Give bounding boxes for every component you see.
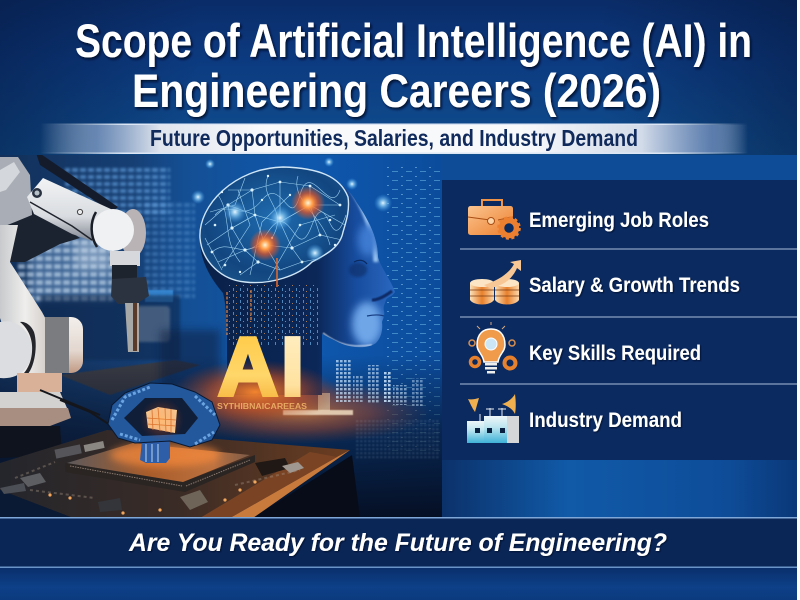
AI glow and letters bbox=[178, 336, 332, 421]
shoulder rollers bbox=[69, 317, 83, 373]
scene backdrop with blurred city bbox=[0, 155, 442, 518]
icon: light bulb with gears bbox=[469, 322, 516, 374]
call to action band bbox=[0, 517, 797, 568]
item: key skills required bbox=[469, 322, 701, 374]
face shading bbox=[323, 180, 392, 346]
wrist and gripper bbox=[110, 251, 140, 266]
elbow cap bbox=[123, 209, 146, 254]
dark lower vignette bbox=[0, 355, 442, 518]
brain network bbox=[200, 167, 349, 335]
item: emerging job roles bbox=[468, 200, 709, 238]
title: Engineering Careers (2026) bbox=[132, 64, 661, 117]
icon: factory with signals bbox=[467, 394, 519, 443]
robotic arm bbox=[0, 150, 149, 458]
panel: key topics bbox=[442, 180, 797, 460]
quantum device over chip bbox=[108, 383, 220, 467]
skyline at lower right bbox=[204, 360, 438, 458]
right edge margin bbox=[797, 0, 800, 600]
call to action band: Are You Ready for the Future of Engineering? bbox=[128, 529, 667, 557]
title bbox=[75, 14, 752, 117]
item: industry demand bbox=[467, 394, 682, 443]
AI head with glowing brain bbox=[200, 167, 395, 395]
item: key skills required: Key Skills Required bbox=[529, 341, 701, 365]
head silhouette bbox=[200, 167, 395, 395]
AI glow and letters: I bbox=[281, 320, 304, 413]
icon: briefcase and gear bbox=[468, 200, 520, 238]
lower arm bbox=[0, 225, 45, 373]
AI glow and letters: A bbox=[218, 320, 278, 413]
item: industry demand: Industry Demand bbox=[529, 408, 682, 432]
upper arm cylinder bbox=[27, 178, 113, 242]
subtitle ribbon: Future Opportunities, Salaries, and Industry Demand bbox=[150, 125, 638, 151]
AI glow and letters: SYTHIBNAICAREEAS bbox=[217, 402, 308, 411]
circuit board and processor bbox=[0, 430, 360, 518]
item: salary and growth trends bbox=[470, 260, 740, 304]
arm cable and dark backing bbox=[36, 155, 118, 210]
board components bbox=[0, 441, 304, 515]
subtitle ribbon bbox=[40, 124, 748, 154]
neck data streams bbox=[228, 285, 320, 345]
shoulder block bbox=[0, 157, 32, 228]
icon: coins and rising arrow bbox=[470, 260, 521, 304]
hero illustration bbox=[0, 150, 442, 518]
item: salary and growth trends: Salary & Growth Trends bbox=[529, 273, 740, 297]
robot base bbox=[17, 373, 62, 394]
bottom strip bbox=[0, 568, 797, 600]
item: emerging job roles: Emerging Job Roles bbox=[529, 208, 709, 232]
processor chip bbox=[65, 455, 255, 492]
